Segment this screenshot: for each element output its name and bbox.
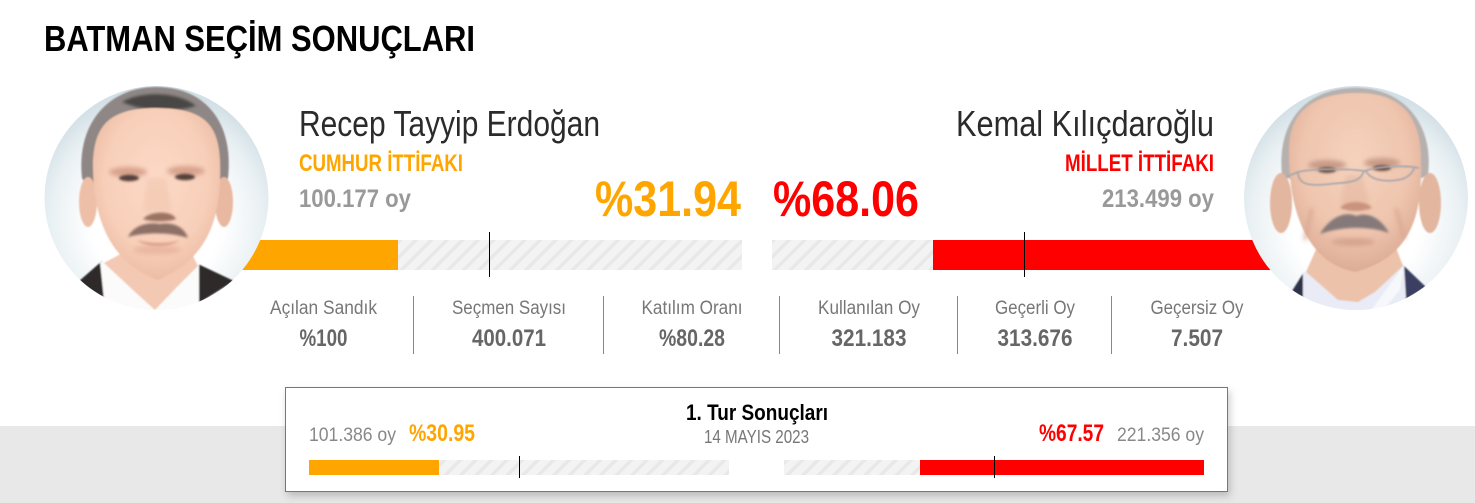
first round date: 14 MAYIS 2023 xyxy=(704,427,809,447)
first round bar: Erdoğan xyxy=(309,456,729,478)
alliance: Cumhur: CUMHUR İTTİFAKI xyxy=(299,150,463,177)
first round percent: Erdoğan: %30.95 xyxy=(409,420,475,447)
stat: Seçmen Sayısı: 400.071 xyxy=(472,325,546,352)
stat: Geçersiz Oy: Geçersiz Oy xyxy=(1150,298,1244,319)
alliance: Millet: MİLLET İTTİFAKI xyxy=(1065,150,1214,177)
title: BATMAN SEÇİM SONUÇLARI xyxy=(44,18,475,59)
main bar: Kılıçdaroğlu xyxy=(772,232,1283,277)
stat: Açılan Sandık xyxy=(270,298,377,352)
gray footer band xyxy=(0,426,1475,503)
stat: Katılım Oranı xyxy=(642,298,742,352)
votes: Erdoğan: 100.177 oy xyxy=(299,185,411,213)
first round votes: Erdoğan: 101.386 oy xyxy=(309,425,396,446)
first round heading: 1. Tur Sonuçları xyxy=(686,400,828,425)
stat row xyxy=(270,298,1244,352)
stat: Geçerli Oy xyxy=(995,298,1075,352)
votes: Kılıçdaroğlu: 213.499 oy xyxy=(1102,185,1214,213)
portrait: Erdoğan xyxy=(44,86,268,318)
stat: Geçersiz Oy xyxy=(1150,298,1244,352)
stat: Seçmen Sayısı xyxy=(452,298,566,352)
first round bar: Kılıçdaroğlu xyxy=(784,456,1204,478)
stat: Katılım Oranı: Katılım Oranı xyxy=(642,298,742,319)
stat: Katılım Oranı: %80.28 xyxy=(659,325,725,352)
stat: Kullanılan Oy: 321.183 xyxy=(832,325,906,352)
first round votes: Kılıçdaroğlu: 221.356 oy xyxy=(1117,425,1204,446)
portrait: Kılıçdaroğlu xyxy=(1244,86,1468,318)
candidate name: Kılıçdaroğlu: Kemal Kılıçdaroğlu xyxy=(956,103,1214,144)
stat: Seçmen Sayısı: Seçmen Sayısı xyxy=(452,298,566,319)
percentage: Kılıçdaroğlu: %68.06 xyxy=(773,171,919,227)
candidate name: Erdoğan: Recep Tayyip Erdoğan xyxy=(299,103,600,144)
first round percent: Kılıçdaroğlu: %67.57 xyxy=(1039,420,1104,447)
candidate block: Erdoğan xyxy=(299,103,741,227)
candidate block: Kılıçdaroğlu xyxy=(773,103,1214,227)
panel: first round results xyxy=(286,388,1228,492)
main bar: Erdoğan xyxy=(230,232,742,277)
stat: Açılan Sandık: Açılan Sandık xyxy=(270,298,377,319)
stat: Kullanılan Oy: Kullanılan Oy xyxy=(818,298,920,319)
stat: Geçerli Oy: 313.676 xyxy=(998,325,1072,352)
stat: Geçerli Oy: Geçerli Oy xyxy=(995,298,1075,319)
stat: Kullanılan Oy xyxy=(818,298,920,352)
stat: Geçersiz Oy: 7.507 xyxy=(1171,325,1223,352)
stat: Açılan Sandık: %100 xyxy=(300,325,348,352)
percentage: Erdoğan: %31.94 xyxy=(595,171,741,227)
